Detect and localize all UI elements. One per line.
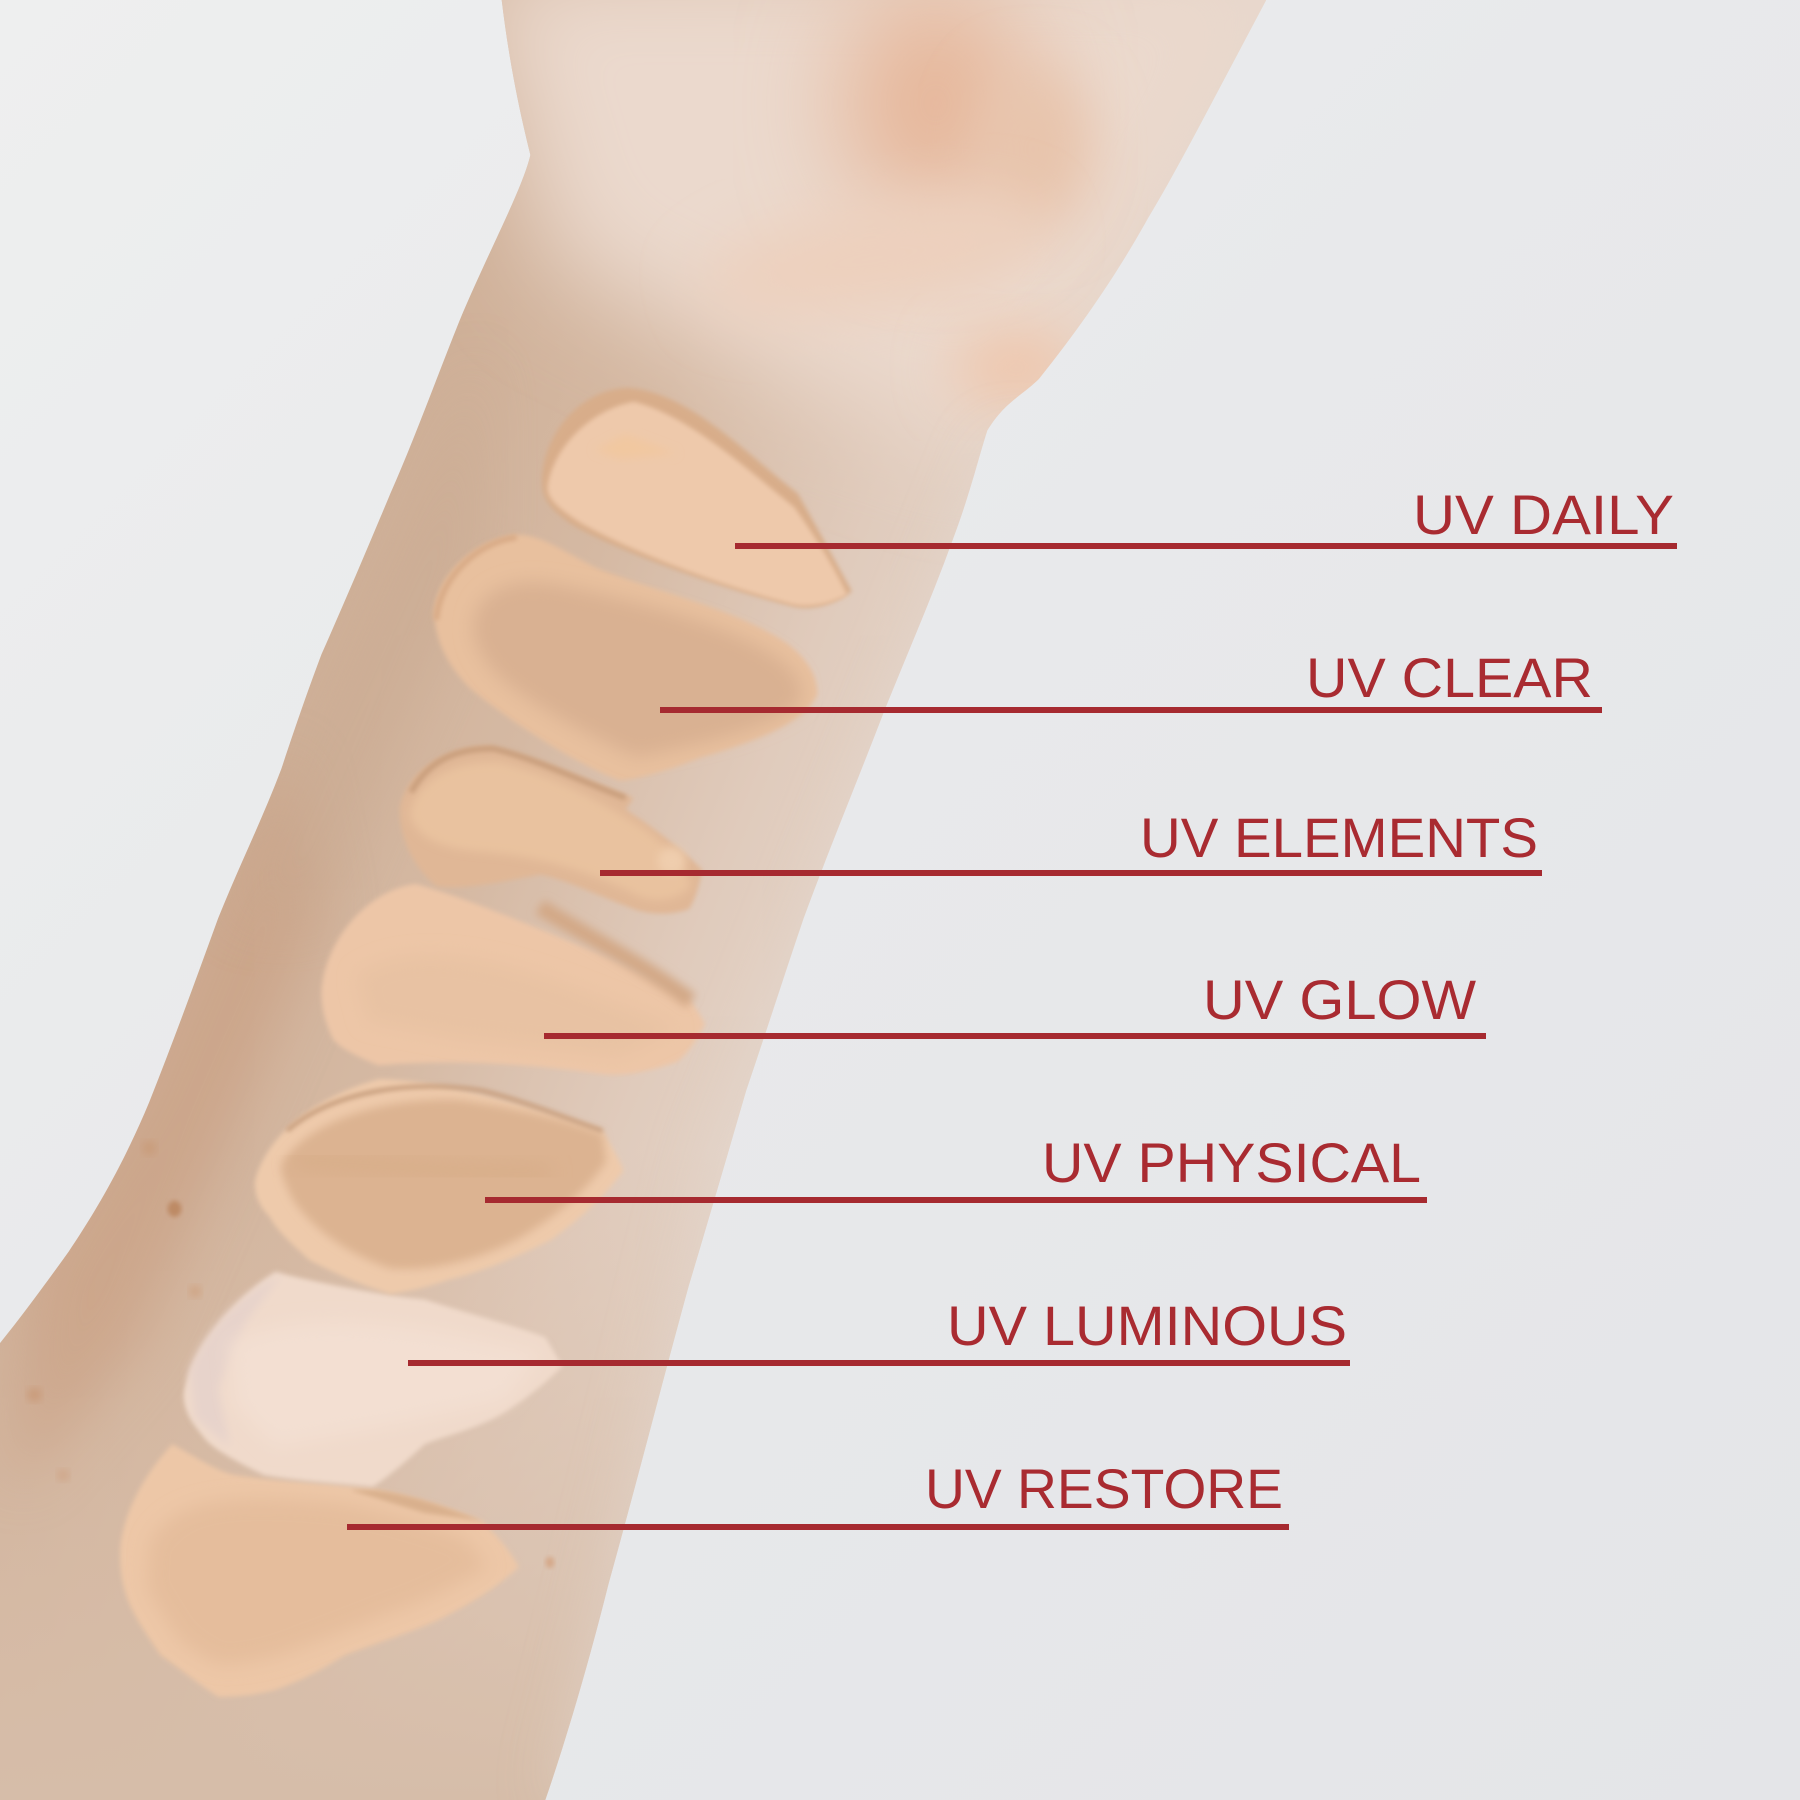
label: UV Luminous: UV LUMINOUS	[947, 1294, 1347, 1357]
swatch: UV Glow	[321, 884, 705, 1075]
label: UV Clear	[660, 646, 1602, 713]
label: UV Restore	[347, 1457, 1289, 1530]
label: UV Physical	[485, 1131, 1427, 1203]
label: UV Elements	[600, 806, 1542, 876]
swatch: UV Restore	[120, 1444, 519, 1697]
label: UV Restore: UV RESTORE	[925, 1457, 1283, 1520]
swatch: UV Physical	[255, 1079, 623, 1294]
label: UV Clear: UV CLEAR	[1306, 646, 1593, 709]
label: UV Elements: UV ELEMENTS	[1140, 806, 1538, 869]
label: UV Daily: UV DAILY	[1413, 483, 1674, 546]
label: UV Glow: UV GLOW	[1203, 968, 1476, 1031]
swatch: UV Clear	[434, 535, 817, 781]
label: UV Physical: UV PHYSICAL	[1042, 1131, 1421, 1194]
label: UV Daily	[735, 483, 1677, 549]
swatch: UV Daily	[542, 388, 852, 608]
label: UV Glow	[544, 968, 1486, 1039]
swatch: UV Elements	[400, 746, 703, 914]
photo: arm with seven product swatches	[0, 0, 1266, 1800]
forearm and hand	[0, 0, 1266, 1800]
swatch: UV Luminous	[184, 1272, 563, 1487]
label: UV Luminous	[408, 1294, 1350, 1366]
